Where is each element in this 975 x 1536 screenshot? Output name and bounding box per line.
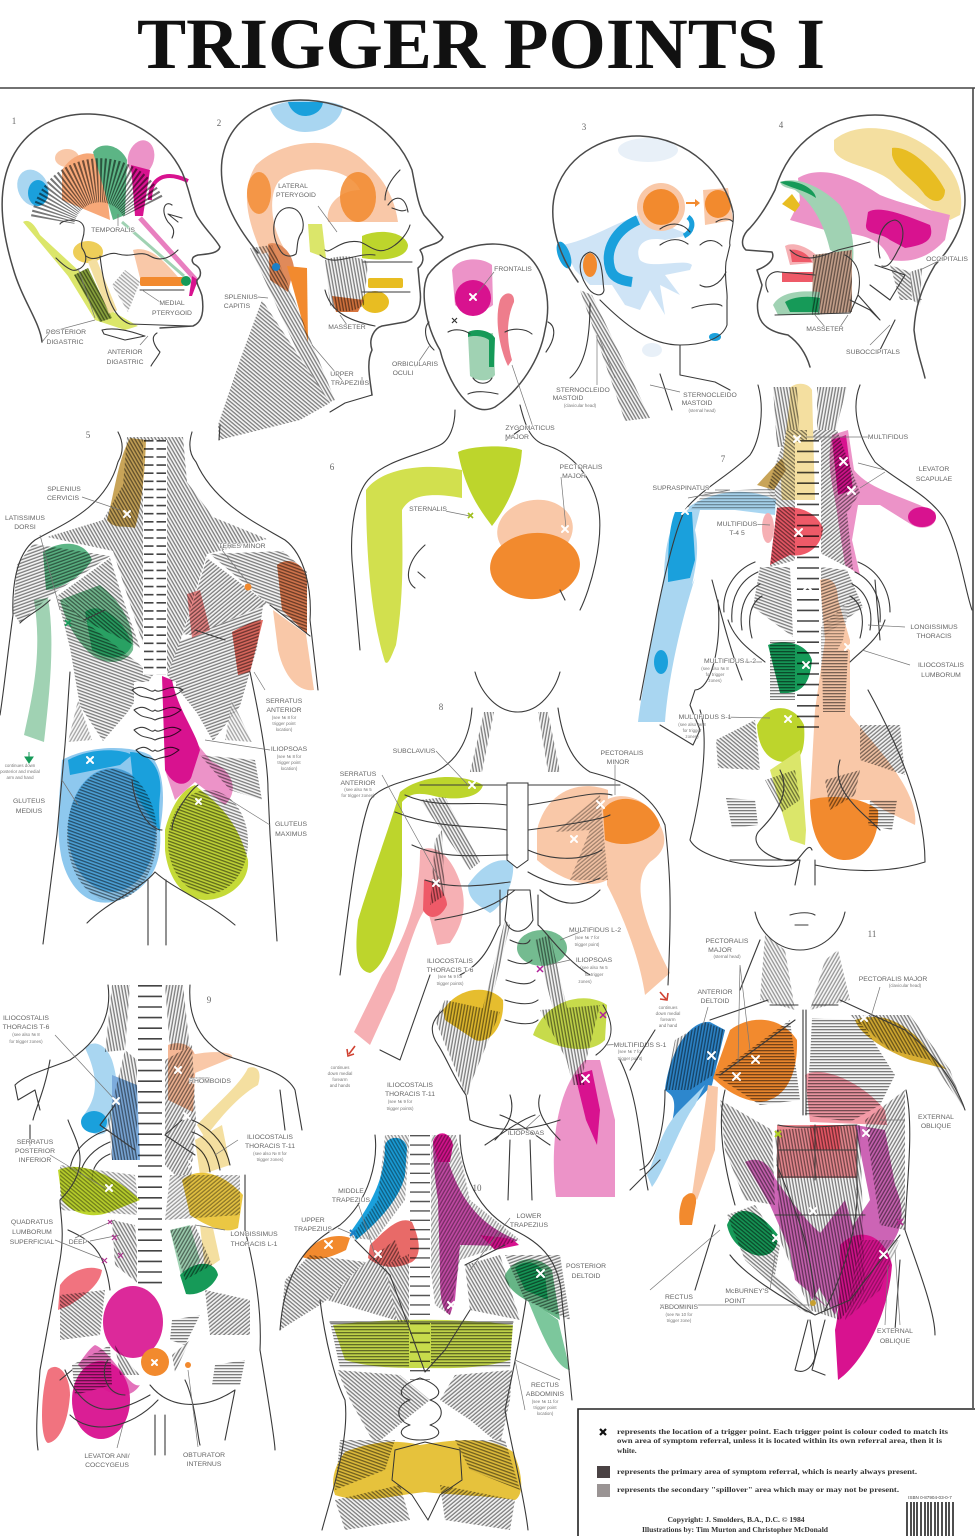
figure 8: front ribcage, pectoralis minor, iliopsoas: down medial [656, 1011, 680, 1016]
figure 4: occipitalis and masseter head: MASSETER [806, 326, 844, 333]
legend box: ISBN 0-87904-03-0-7 [908, 1495, 952, 1500]
figure 5: back with latissimus, iliopsoas, gluteus: location) [276, 727, 293, 732]
legend swatch: secondary area [597, 1484, 610, 1497]
figure 10: trapezius, posterior deltoid, rectus abdominis back: LOWER [517, 1213, 542, 1220]
legend box: represents the secondary "spillover" area which may or may not be present. [617, 1485, 899, 1494]
figure 8: front ribcage, pectoralis minor, iliopsoas: MULTIFIDUS S-1 [614, 1042, 667, 1049]
figure 2: pterygoid, masseter and trapezius head: MASSETER [328, 324, 366, 331]
figure 11: front torso, pectoralis major, deltoid, rectus abdominis, external oblique: McBURNEY'S [725, 1288, 769, 1295]
figure 11: front torso, pectoralis major, deltoid, rectus abdominis, external oblique: OBLIQUE [880, 1338, 911, 1345]
barcode [907, 1502, 953, 1536]
figure 11: front torso, pectoralis major, deltoid, rectus abdominis, external oblique: ANTERIOR [697, 989, 733, 996]
figure 11: front torso, pectoralis major, deltoid, rectus abdominis, external oblique: OBLIQUE [921, 1123, 952, 1130]
figure 11: front torso, pectoralis major, deltoid, rectus abdominis, external oblique: (see № 10 for [666, 1312, 693, 1317]
figure 9: iliocostalis thoracis, quadratus lumborum, levator ani back: LONGISSIMUS [230, 1231, 278, 1238]
figure 8: front ribcage, pectoralis minor, iliopsoas: ILIOCOSTALIS [387, 1082, 433, 1089]
figure 4: occipitalis and masseter head: 4 [779, 120, 784, 130]
figure 8: front ribcage, pectoralis minor, iliopsoas: MULTIFIDUS L-2 [569, 927, 621, 934]
figure 5: back with latissimus, iliopsoas, gluteus: LATISSIMUS [5, 515, 45, 522]
figure 6: frontalis head and sternalis / pectoralis chest: 6 [330, 462, 335, 472]
figure 8: front ribcage, pectoralis minor, iliopsoas: (see № 7 for [575, 935, 600, 940]
figure 11: front torso, pectoralis major, deltoid, rectus abdominis, external oblique: trigger zone) [667, 1318, 692, 1323]
figure 11: front torso, pectoralis major, deltoid, rectus abdominis, external oblique [630, 912, 965, 1380]
figure 9: iliocostalis thoracis, quadratus lumborum, levator ani back: LUMBORUM [12, 1229, 52, 1236]
figure 6: frontalis head and sternalis / pectoralis chest: STERNALIS [409, 506, 447, 513]
figure 8: front ribcage, pectoralis minor, iliopsoas: SERRATUS [340, 771, 377, 778]
figure 6: frontalis head and sternalis / pectoralis chest: ZYGOMATICUS [505, 425, 555, 432]
figure 11: front torso, pectoralis major, deltoid, rectus abdominis, external oblique: EXTERNAL [918, 1114, 954, 1121]
figure 9: iliocostalis thoracis, quadratus lumborum, levator ani back: INTERNUS [187, 1461, 222, 1468]
legend box: Illustrations by: Tim Murton and Christopher McDonald [642, 1525, 829, 1534]
figure 9: iliocostalis thoracis, quadratus lumborum, levator ani back: SUPERFICIAL [10, 1239, 54, 1246]
figure 7: multifidus, levator scapulae back: for trigger [683, 728, 702, 733]
figure 6: frontalis head and sternalis / pectoralis chest: FRONTALIS [494, 266, 532, 273]
figure 10: trapezius, posterior deltoid, rectus abdominis back: POSTERIOR [566, 1263, 606, 1270]
figure 2: pterygoid, masseter and trapezius head: UPPER [330, 371, 354, 378]
figure 8: front ribcage, pectoralis minor, iliopsoas: trigger point) [618, 1056, 643, 1061]
figure 10: trapezius, posterior deltoid, rectus abdominis back: trigger point [533, 1405, 557, 1410]
figure 3: sternocleidomastoid head: (sternal head) [688, 408, 716, 413]
figure 6: frontalis head and sternalis / pectoralis chest: ORBICULARIS [392, 361, 439, 368]
figure 8: front ribcage, pectoralis minor, iliopsoas [328, 672, 680, 1200]
figure 11: front torso, pectoralis major, deltoid, rectus abdominis, external oblique: POINT [725, 1298, 745, 1305]
legend box [578, 1409, 975, 1536]
figure 7: multifidus, levator scapulae back: LONGISSIMUS [910, 624, 958, 631]
figure 7: multifidus, levator scapulae back: zones) [685, 734, 699, 739]
figure 4: occipitalis and masseter head: OCCIPITALIS [926, 256, 968, 263]
figure 7: multifidus, levator scapulae back: LUMBORUM [921, 672, 961, 679]
figure 5: back with latissimus, iliopsoas, gluteus: GLUTEUS [275, 821, 308, 828]
figure 9: iliocostalis thoracis, quadratus lumborum, levator ani back: SERRATUS [17, 1139, 54, 1146]
figure 7: multifidus, levator scapulae back: ILIOCOSTALIS [918, 662, 964, 669]
figure 10: trapezius, posterior deltoid, rectus abdominis back: DELTOID [572, 1273, 600, 1280]
figure 6: frontalis head and sternalis / pectoralis chest: MAJOR [562, 473, 586, 480]
figure 10: trapezius, posterior deltoid, rectus abdominis back: TRAPEZIUS [332, 1197, 371, 1204]
figure 4: occipitalis and masseter head: SUBOCCIPITALS [846, 349, 900, 356]
figure 1: temporalis and digastric head: POSTERIOR [46, 329, 86, 336]
figure 7: multifidus, levator scapulae back: (see also № 8 [701, 666, 729, 671]
figure 2: pterygoid, masseter and trapezius head [217, 100, 443, 440]
legend box: represents the primary area of symptom referral, which is nearly always present. [617, 1467, 917, 1476]
figure 7: multifidus, levator scapulae back: (see also № 8 [678, 722, 706, 727]
figure 5: back with latissimus, iliopsoas, gluteus: CERVICIS [47, 495, 79, 502]
figure 8: front ribcage, pectoralis minor, iliopsoas: for trigger zones) [341, 793, 375, 798]
figure 1: temporalis and digastric head: 1 [12, 116, 16, 126]
figure 9: iliocostalis thoracis, quadratus lumborum, levator ani back: LEVATOR ANI/ [84, 1453, 130, 1460]
figure 5: back with latissimus, iliopsoas, gluteus: DORSI [14, 524, 36, 531]
figure 8: front ribcage, pectoralis minor, iliopsoas: trigger points) [437, 981, 464, 986]
figure 8: front ribcage, pectoralis minor, iliopsoas: continues [659, 1005, 678, 1010]
legend box: white. [617, 1446, 637, 1455]
figure 8: front ribcage, pectoralis minor, iliopsoas: ILIOPSOAS [576, 957, 613, 964]
figure 8: front ribcage, pectoralis minor, iliopsoas: PECTORALIS [601, 750, 644, 757]
figure 9: iliocostalis thoracis, quadratus lumborum, levator ani back: trigger zones) [257, 1157, 284, 1162]
figure 9: iliocostalis thoracis, quadratus lumborum, levator ani back: ILIOCOSTALIS [3, 1015, 49, 1022]
figure 11: front torso, pectoralis major, deltoid, rectus abdominis, external oblique: (sternal head) [713, 954, 741, 959]
figure 6: frontalis head and sternalis / pectoralis chest: MAJOR [505, 434, 529, 441]
figure 5: back with latissimus, iliopsoas, gluteus [0, 430, 318, 945]
figure 3: sternocleidomastoid head: STERNOCLEIDO [683, 392, 737, 399]
figure 9: iliocostalis thoracis, quadratus lumborum, levator ani back: for trigger zones) [9, 1039, 43, 1044]
figure 8: front ribcage, pectoralis minor, iliopsoas: ANTERIOR [340, 780, 376, 787]
figure 8: front ribcage, pectoralis minor, iliopsoas: continues [331, 1065, 350, 1070]
figure 11: front torso, pectoralis major, deltoid, rectus abdominis, external oblique: EXTERNAL [877, 1328, 913, 1335]
figure 9: iliocostalis thoracis, quadratus lumborum, levator ani back: THORACIS L-1 [231, 1241, 278, 1248]
figure 5: back with latissimus, iliopsoas, gluteus: posterior and medial [0, 769, 40, 774]
figure 8: front ribcage, pectoralis minor, iliopsoas: ILIOPSOAS [508, 1130, 545, 1137]
figure 7: multifidus, levator scapulae back: MULTIFIDUS L-2 [704, 658, 756, 665]
figure 7: multifidus, levator scapulae back: 7 [721, 454, 726, 464]
figure 8: front ribcage, pectoralis minor, iliopsoas: (see № 9 for [438, 974, 463, 979]
figure 6: frontalis head and sternalis / pectoralis chest: OCULI [393, 370, 413, 377]
figure 6: frontalis head and sternalis / pectoralis chest: PECTORALIS [560, 464, 603, 471]
figure 10: trapezius, posterior deltoid, rectus abdominis back [280, 1133, 606, 1530]
figure 9: iliocostalis thoracis, quadratus lumborum, levator ani back: ILIOCOSTALIS [247, 1134, 293, 1141]
figure 9: iliocostalis thoracis, quadratus lumborum, levator ani back: POSTERIOR [15, 1148, 55, 1155]
figure 10: trapezius, posterior deltoid, rectus abdominis back: location) [537, 1411, 554, 1416]
figure 8: front ribcage, pectoralis minor, iliopsoas: THORACIS T-6 [427, 967, 474, 974]
figure 9: iliocostalis thoracis, quadratus lumborum, levator ani back: THORACIS T-6 [3, 1024, 50, 1031]
figure 5: back with latissimus, iliopsoas, gluteus: GLUTEUS [13, 798, 46, 805]
figure 7: multifidus, levator scapulae back: SCAPULAE [916, 476, 953, 483]
figure 9: iliocostalis thoracis, quadratus lumborum, levator ani back: DEEP [69, 1239, 88, 1246]
figure 3: sternocleidomastoid head: MASTOID [682, 400, 713, 407]
figure 11: front torso, pectoralis major, deltoid, rectus abdominis, external oblique: RECTUS [665, 1294, 693, 1301]
legend icon: trigger point cross [600, 1429, 606, 1435]
figure 8: front ribcage, pectoralis minor, iliopsoas: trigger point) [575, 942, 600, 947]
figure 11: front torso, pectoralis major, deltoid, rectus abdominis, external oblique: 11 [868, 929, 876, 939]
figure 3: sternocleidomastoid head: (clavicular head) [564, 403, 597, 408]
figure 9: iliocostalis thoracis, quadratus lumborum, levator ani back [3, 985, 302, 1469]
legend box: represents the location of a trigger point. Each trigger point is colour coded to match its [617, 1427, 948, 1436]
figure 7: multifidus, levator scapulae back: THORACIS [916, 633, 952, 640]
figure 2: pterygoid, masseter and trapezius head: PTERYGOID [276, 192, 316, 199]
figure 7: multifidus, levator scapulae back [638, 384, 972, 885]
figure 1: temporalis and digastric head: PTERYGOID [152, 310, 192, 317]
figure 9: iliocostalis thoracis, quadratus lumborum, levator ani back: (see also № 8 for [253, 1151, 287, 1156]
figure 1: temporalis and digastric head: MEDIAL [159, 300, 185, 307]
figure 11: front torso, pectoralis major, deltoid, rectus abdominis, external oblique: ABDOMINIS [660, 1304, 699, 1311]
figure 1: temporalis and digastric head: DIGASTRIC [46, 339, 84, 346]
figure 5: back with latissimus, iliopsoas, gluteus: (see № 8 for [272, 715, 297, 720]
figure 1: temporalis and digastric head: TEMPORALIS [91, 227, 135, 234]
figure 8: front ribcage, pectoralis minor, iliopsoas: trigger points) [387, 1106, 414, 1111]
figure 9: iliocostalis thoracis, quadratus lumborum, levator ani back: 9 [207, 995, 212, 1005]
figure 8: front ribcage, pectoralis minor, iliopsoas: (see № 9 for [388, 1099, 413, 1104]
figure 10: trapezius, posterior deltoid, rectus abdominis back: UPPER [301, 1217, 325, 1224]
figure 4: occipitalis and masseter head [743, 115, 968, 378]
figure 11: front torso, pectoralis major, deltoid, rectus abdominis, external oblique: (clavicular head) [889, 983, 922, 988]
figure 10: trapezius, posterior deltoid, rectus abdominis back: TRAPEZIUS [294, 1226, 333, 1233]
copyright: Copyright: J. Smolders, B.A., D.C. © 1984 [667, 1515, 805, 1524]
figure 8: front ribcage, pectoralis minor, iliopsoas: MINOR [607, 759, 629, 766]
figure 9: iliocostalis thoracis, quadratus lumborum, levator ani back: COCCYGEUS [85, 1462, 129, 1469]
figure 5: back with latissimus, iliopsoas, gluteus: trigger point [277, 760, 301, 765]
figure 7: multifidus, levator scapulae back: SUPRASPINATUS [653, 485, 710, 492]
figure 5: back with latissimus, iliopsoas, gluteus: SPLENIUS [47, 486, 81, 493]
figure 7: multifidus, levator scapulae back: LEVATOR [919, 466, 949, 473]
figure 5: back with latissimus, iliopsoas, gluteus: SERRATUS [266, 698, 303, 705]
figure 5: back with latissimus, iliopsoas, gluteus: (see № 8 for [277, 754, 302, 759]
figure 5: back with latissimus, iliopsoas, gluteus: continues down [5, 763, 36, 768]
figure 5: back with latissimus, iliopsoas, gluteus: trigger point [272, 721, 296, 726]
figure 1: temporalis and digastric head [2, 114, 220, 366]
ribs, figure 7 [724, 562, 890, 662]
figure 10: trapezius, posterior deltoid, rectus abdominis back: 10 [472, 1183, 482, 1193]
figure 5: back with latissimus, iliopsoas, gluteus: ANTERIOR [266, 707, 302, 714]
figure 8: front ribcage, pectoralis minor, iliopsoas: forearm [332, 1077, 348, 1082]
figure 8: front ribcage, pectoralis minor, iliopsoas: (see № 7 for [618, 1049, 643, 1054]
figure 8: front ribcage, pectoralis minor, iliopsoas: SUBCLAVIUS [393, 748, 436, 755]
legend swatch: primary area [597, 1466, 610, 1478]
figure 8: front ribcage, pectoralis minor, iliopsoas: zones) [578, 979, 592, 984]
figure 5: back with latissimus, iliopsoas, gluteus: arm and hand [6, 775, 34, 780]
title: TRIGGER POINTS I [137, 4, 825, 84]
figure 8: front ribcage, pectoralis minor, iliopsoas: ILIOCOSTALIS [427, 958, 473, 965]
figure 7: multifidus, levator scapulae back: MULTIFIDUS [717, 521, 758, 528]
figure 9: iliocostalis thoracis, quadratus lumborum, levator ani back: (see also № 8 [12, 1032, 40, 1037]
figure 10: trapezius, posterior deltoid, rectus abdominis back: RECTUS [531, 1382, 559, 1389]
figure 11: front torso, pectoralis major, deltoid, rectus abdominis, external oblique: MAJOR [708, 947, 732, 954]
figure 9: iliocostalis thoracis, quadratus lumborum, levator ani back: RHOMBOIDS [189, 1078, 231, 1085]
figure 11: front torso, pectoralis major, deltoid, rectus abdominis, external oblique: PECTORALIS [706, 938, 749, 945]
figure 8: front ribcage, pectoralis minor, iliopsoas: for trigger [585, 972, 604, 977]
figure 8: front ribcage, pectoralis minor, iliopsoas: THORACIS T-11 [385, 1091, 435, 1098]
figure 10: trapezius, posterior deltoid, rectus abdominis back: (see № 11 for [532, 1399, 559, 1404]
figure 2: pterygoid, masseter and trapezius head: LATERAL [278, 183, 308, 190]
figure 3: sternocleidomastoid head: STERNOCLEIDO [556, 387, 610, 394]
figure 5: back with latissimus, iliopsoas, gluteus: 5 [86, 430, 91, 440]
figure 11: front torso, pectoralis major, deltoid, rectus abdominis, external oblique: DELTOID [701, 998, 729, 1005]
figure 9: iliocostalis thoracis, quadratus lumborum, levator ani back: THORACIS T-11 [245, 1143, 295, 1150]
figure 2: pterygoid, masseter and trapezius head: SPLENIUS [224, 294, 258, 301]
figure 8: front ribcage, pectoralis minor, iliopsoas: down medial [328, 1071, 352, 1076]
figure 7: multifidus, levator scapulae back: T-4 5 [729, 530, 745, 537]
figure 8: front ribcage, pectoralis minor, iliopsoas: (see also № 5 [344, 787, 372, 792]
figure 7: multifidus, levator scapulae back: for trigger [706, 672, 725, 677]
figure 5: back with latissimus, iliopsoas, gluteus: location) [281, 766, 298, 771]
ribs, figure 9 [70, 1120, 230, 1180]
figure 9: iliocostalis thoracis, quadratus lumborum, levator ani back: QUADRATUS [11, 1219, 54, 1226]
figure 6: frontalis head and sternalis / pectoralis chest [330, 244, 603, 663]
figure 5: back with latissimus, iliopsoas, gluteus: MEDIUS [16, 808, 43, 815]
figure 7: multifidus, levator scapulae back: MULTIFIDUS S-1 [679, 714, 732, 721]
figure 8: front ribcage, pectoralis minor, iliopsoas: 8 [439, 702, 444, 712]
figure 5: back with latissimus, iliopsoas, gluteus: TERES MINOR [218, 543, 266, 550]
figure 3: sternocleidomastoid head: 3 [582, 122, 587, 132]
figure 7: multifidus, levator scapulae back: zones) [708, 678, 722, 683]
figure 5: back with latissimus, iliopsoas, gluteus: ILIOPSOAS [271, 746, 308, 753]
figure 8: front ribcage, pectoralis minor, iliopsoas: and hands [330, 1083, 351, 1088]
figure 10: trapezius, posterior deltoid, rectus abdominis back: MIDDLE [338, 1188, 364, 1195]
figure 1: temporalis and digastric head: ANTERIOR [107, 349, 143, 356]
figure 9: iliocostalis thoracis, quadratus lumborum, levator ani back: INFERIOR [19, 1157, 51, 1164]
figure 8: front ribcage, pectoralis minor, iliopsoas: forearm [660, 1017, 676, 1022]
figure 8: front ribcage, pectoralis minor, iliopsoas: and hand [659, 1023, 678, 1028]
figure 2: pterygoid, masseter and trapezius head: TRAPEZIUS [331, 380, 370, 387]
figure 8: front ribcage, pectoralis minor, iliopsoas: (see also № 5 [580, 965, 608, 970]
figure 11: front torso, pectoralis major, deltoid, rectus abdominis, external oblique: PECTORALIS MAJOR [859, 976, 927, 983]
legend box: own area of symptom referral, unless it is located within its own referral area, then it is [617, 1436, 942, 1445]
figure 5: back with latissimus, iliopsoas, gluteus: MAXIMUS [275, 831, 307, 838]
figure 7: multifidus, levator scapulae back: MULTIFIDUS [868, 434, 909, 441]
figure 2: pterygoid, masseter and trapezius head: CAPITIS [224, 303, 251, 310]
figure 2: pterygoid, masseter and trapezius head: 2 [217, 118, 221, 128]
figure 3: sternocleidomastoid head [553, 122, 737, 421]
figure 10: trapezius, posterior deltoid, rectus abdominis back: TRAPEZIUS [510, 1222, 549, 1229]
figure 9: iliocostalis thoracis, quadratus lumborum, levator ani back: OBTURATOR [183, 1452, 225, 1459]
figure 10: trapezius, posterior deltoid, rectus abdominis back: ABDOMINIS [526, 1391, 565, 1398]
figure 3: sternocleidomastoid head: MASTOID [553, 395, 584, 402]
figure 1: temporalis and digastric head: DIGASTRIC [106, 359, 144, 366]
